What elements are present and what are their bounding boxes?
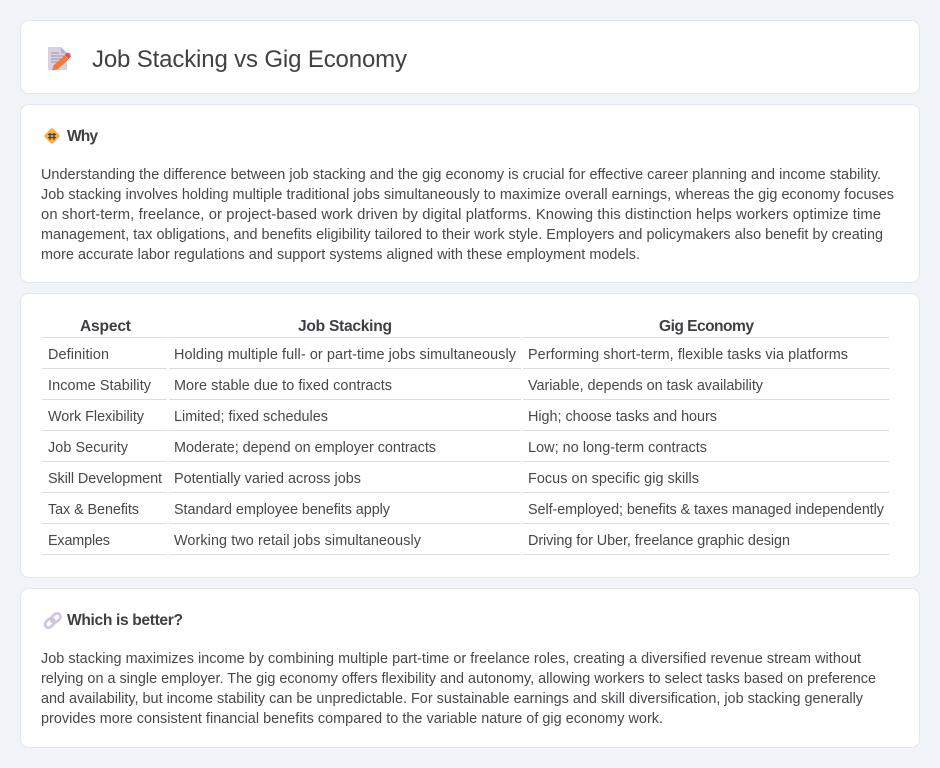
- row: income stability: More stable due to fixed contracts: [174, 378, 392, 394]
- panel: header: [20, 20, 920, 94]
- row: tax and benefits: Self-employed; benefits & taxes managed independently: [528, 502, 885, 518]
- row: definition: Performing short-term, flexible tasks via platforms: [528, 347, 848, 363]
- row: job security: Low; no long-term contracts: [528, 440, 707, 456]
- row: examples: Examples: [48, 533, 110, 549]
- row: definition: Holding multiple full- or part-time jobs simultaneously: [174, 347, 517, 363]
- row: job security: [42, 440, 889, 462]
- row: skill development: Skill Development: [48, 471, 162, 487]
- row: tax and benefits: Standard employee benefits apply: [174, 502, 391, 518]
- text block: which is better: relying on a single employer. The gig economy offers flexibility and autonomy, allowing workers to select tasks based on preference: [41, 671, 876, 687]
- text block: why: on short-term, freelance, or project-based work driven by digital platforms. Knowing this distinction helps workers optimize time: [41, 207, 881, 223]
- table header: Gig Economy: [659, 318, 754, 335]
- row: income stability: Variable, depends on task availability: [528, 378, 764, 394]
- text block: why: Job stacking involves holding multiple traditional jobs simultaneously to maximize overall earnings, whereas the gig economy focuses: [41, 187, 894, 203]
- text block: which is better: provides more consistent financial benefits compared to the variable nature of gig economy work.: [41, 711, 663, 727]
- title: Job Stacking vs Gig Economy: [92, 46, 407, 73]
- table header: [42, 318, 889, 338]
- row: tax and benefits: [42, 502, 889, 524]
- row: job security: Job Security: [48, 440, 129, 456]
- row: definition: [42, 347, 889, 368]
- panel: why: [20, 104, 920, 282]
- text block: which is better: [41, 651, 876, 727]
- table header: Aspect: [80, 318, 131, 335]
- heading: which is better: Which is better?: [67, 612, 183, 629]
- row: examples: Working two retail jobs simultaneously: [174, 533, 422, 549]
- heading: why: Why: [67, 128, 98, 145]
- row: examples: Driving for Uber, freelance graphic design: [528, 533, 790, 549]
- row: income stability: Income Stability: [48, 378, 152, 394]
- text block: which is better: and availability, but income stability can be unpredictable. For sustainable earnings and skill diversification, job stacking generally: [41, 691, 864, 707]
- text block: why: Understanding the difference between job stacking and the gig economy is crucial for effective career planning and income stability.: [41, 167, 881, 183]
- row: skill development: Potentially varied across jobs: [174, 471, 361, 487]
- icon: link: [44, 612, 62, 629]
- row: skill development: [42, 471, 889, 492]
- text block: which is better: Job stacking maximizes income by combining multiple part-time or freelance roles, creating a diversified revenue stream without: [41, 651, 861, 667]
- row: examples: [42, 533, 889, 554]
- row: definition: Definition: [48, 347, 109, 363]
- panel: comparison table: [20, 294, 920, 578]
- row: income stability: [42, 378, 889, 400]
- icon: diamond sign: [44, 128, 60, 144]
- row: work flexibility: [42, 409, 889, 430]
- row: work flexibility: High; choose tasks and hours: [528, 409, 717, 425]
- row: work flexibility: Work Flexibility: [48, 409, 145, 425]
- row: skill development: Focus on specific gig skills: [528, 471, 699, 487]
- row: job security: Moderate; depend on employer contracts: [174, 440, 436, 456]
- text block: why: [41, 167, 894, 263]
- row: work flexibility: Limited; fixed schedules: [174, 409, 328, 425]
- icon: memo with pencil: [48, 47, 71, 70]
- table header: Job Stacking: [298, 318, 392, 335]
- panel: which is better: [20, 588, 920, 748]
- text block: why: management, tax obligations, and benefits eligibility tailored to their work style. Employers and policymakers also benefit by creating: [41, 227, 883, 243]
- row: tax and benefits: Tax & Benefits: [48, 502, 139, 518]
- text block: why: more accurate labor regulations and support systems aligned with these employment models.: [41, 247, 640, 263]
